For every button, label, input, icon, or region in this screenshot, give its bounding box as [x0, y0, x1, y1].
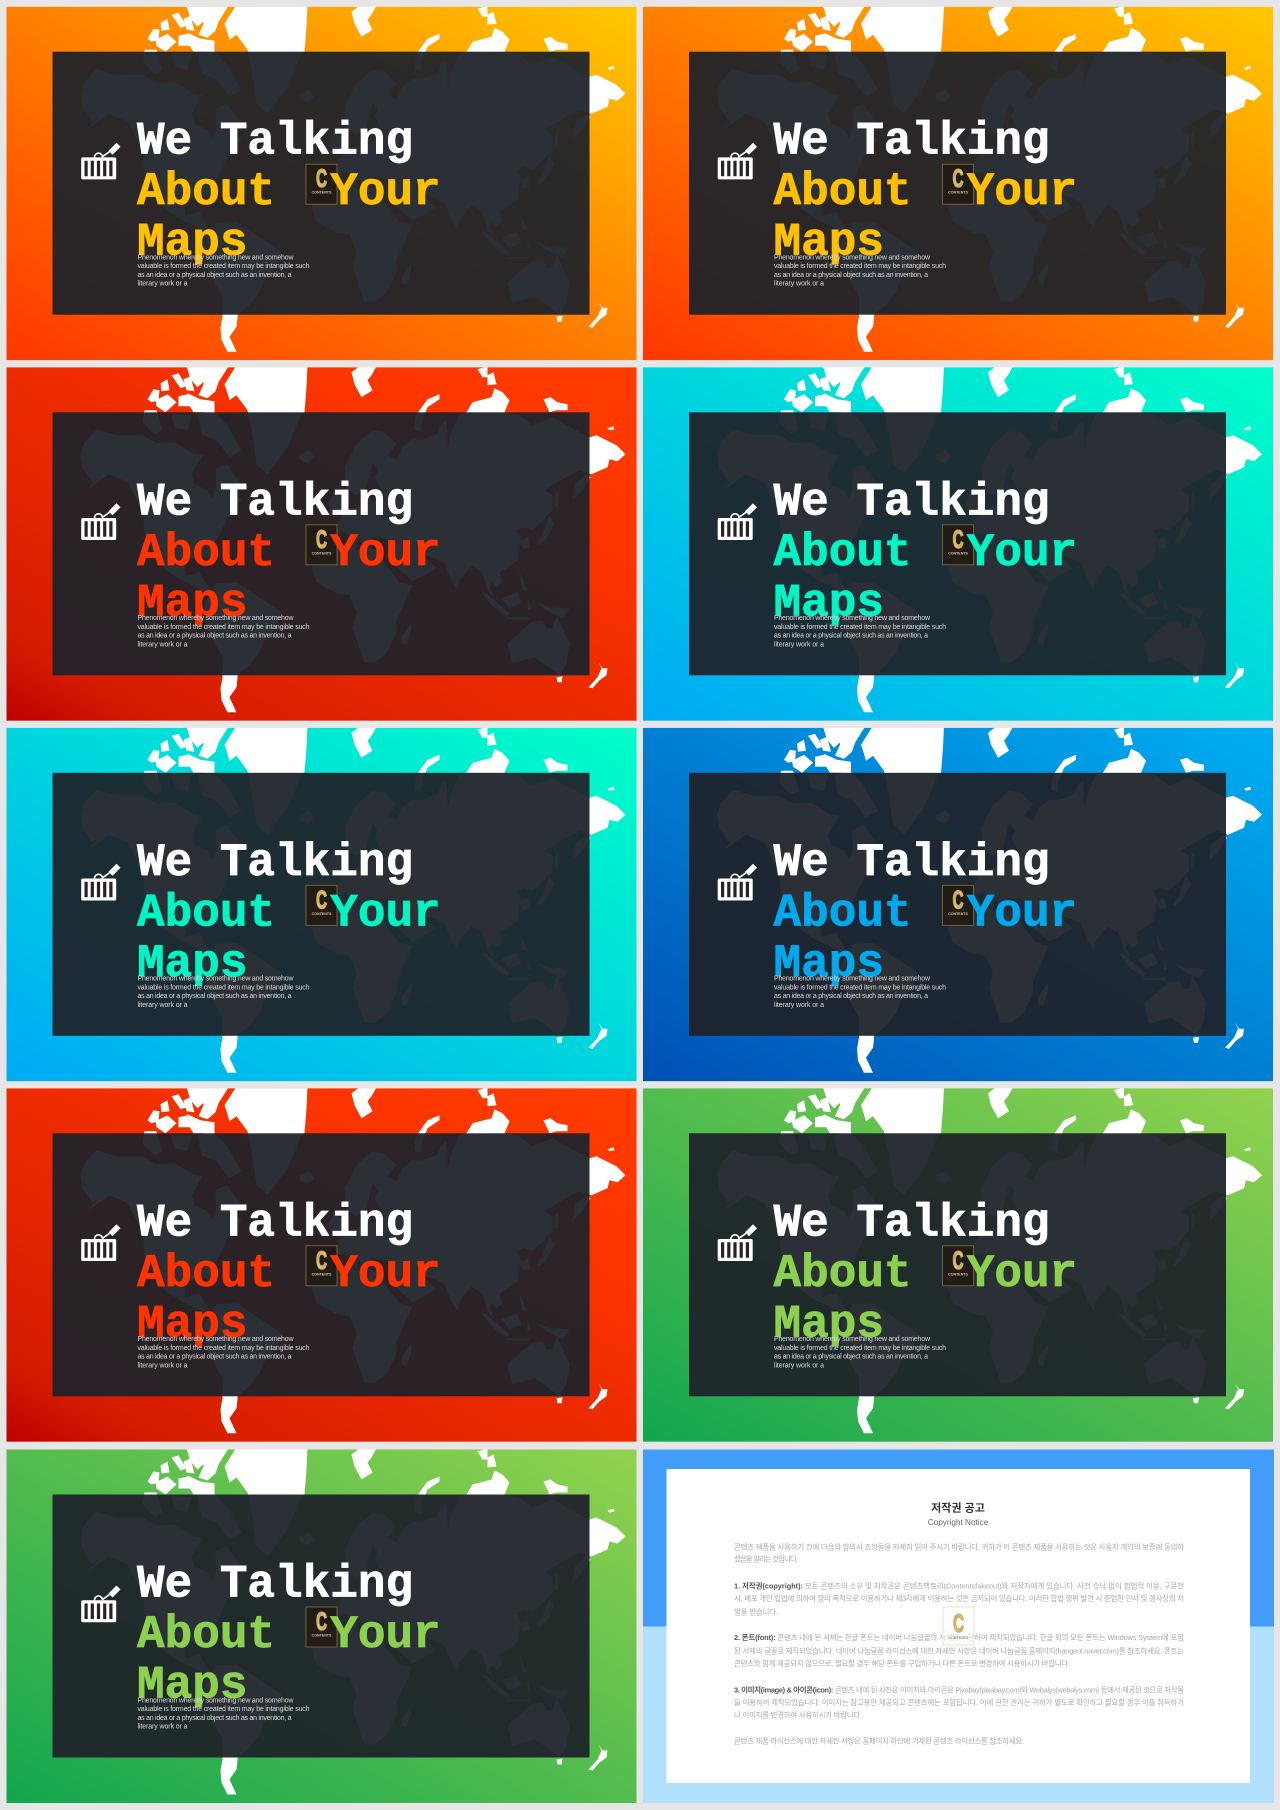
- section 1 line 3: 벌을 받습니다.: [734, 1607, 778, 1616]
- logo: CONTENTS: [312, 912, 332, 916]
- dark panel: [52, 52, 590, 315]
- white notice card: [666, 1469, 1250, 1783]
- world map: [717, 1086, 1262, 1433]
- icon: container: [718, 864, 757, 900]
- body text: Phenomenon whereby something new and somehow: [138, 1336, 294, 1343]
- section 3 line 2: 을 이용하여 제작되었습니다. 이미지는 참고용만 제공되고 콘텐츠에는 포함됩니다. 이에 관한 권리는 귀하가 별도로 확인하고 필요할 경우 이를 취득하거: [734, 1698, 1184, 1707]
- panel: slide 8 green: [643, 1088, 1273, 1442]
- body text: Phenomenon whereby something new and somehow: [138, 976, 294, 983]
- logo: [942, 164, 974, 204]
- title: About Your: [137, 527, 441, 579]
- world map: [80, 1448, 626, 1794]
- section 2 font: 2. 폰트(font): 콘텐츠 내에 된 서체는 한글 폰트는 네이버 나눔글꼴의 서체를 사용하여 제작되었습니다. 한글 외의 모든 폰트는 Windows System에 포함: [734, 1633, 1184, 1642]
- logo: [942, 885, 974, 925]
- title: Maps: [137, 577, 247, 629]
- title: Maps: [774, 217, 884, 269]
- closing line: 콘텐츠 제품 라이선스에 대한 자세한 사항은 홈페이지 하단에 기재된 콘텐츠 라이선스를 참조하세요.: [734, 1736, 1024, 1745]
- logo: CONTENTS: [312, 191, 332, 195]
- logo: [942, 525, 974, 565]
- title: About Your: [137, 887, 441, 939]
- body text: Phenomenon whereby something new and somehow: [138, 1697, 294, 1704]
- background bottom band: [643, 1626, 1274, 1803]
- title: Maps: [137, 1660, 247, 1712]
- logo: [942, 1246, 974, 1286]
- logo: C: [316, 165, 327, 193]
- title: Maps: [774, 938, 884, 990]
- logo: CONTENTS: [312, 1634, 332, 1638]
- panel: slide 6 blue: [643, 728, 1273, 1082]
- title: Maps: [137, 938, 247, 990]
- title: We Talking: [774, 116, 1050, 168]
- logo: CONTENTS: [948, 912, 968, 916]
- panel: slide 10 copyright notice: [643, 1450, 1274, 1803]
- world map: [80, 365, 626, 712]
- panel: slide 4 cyan: [643, 367, 1273, 721]
- dark panel: [52, 412, 590, 675]
- body text: literary work or a: [774, 641, 824, 648]
- logo: [306, 525, 337, 565]
- title: About Your: [774, 887, 1077, 939]
- background gradient: [6, 367, 636, 721]
- world map: [717, 5, 1262, 352]
- body text: literary work or a: [138, 641, 188, 648]
- dark panel: [52, 773, 590, 1036]
- body text: valuable is formed the created item may be intangible such: [774, 263, 946, 270]
- background gradient: [6, 728, 636, 1081]
- title: About Your: [774, 527, 1077, 579]
- icon: container: [718, 503, 757, 540]
- title: About Your: [774, 166, 1077, 218]
- body text: literary work or a: [138, 281, 188, 288]
- body text: Phenomenon whereby something new and somehow: [774, 255, 931, 262]
- body text: literary work or a: [774, 1002, 824, 1009]
- background top band: [643, 1450, 1274, 1626]
- title: We Talking: [137, 837, 413, 889]
- title: We Talking: [137, 116, 413, 168]
- body text: Phenomenon whereby something new and somehow: [774, 1336, 931, 1343]
- dark panel: [52, 1133, 590, 1396]
- logo: CONTENTS: [948, 551, 968, 555]
- logo: C: [316, 1247, 327, 1275]
- logo: C: [316, 1608, 327, 1636]
- world map: [717, 726, 1262, 1073]
- logo: CONTENTS: [948, 1272, 968, 1276]
- body text: Phenomenon whereby something new and somehow: [774, 976, 931, 983]
- panel: slide 3 red: [6, 367, 636, 721]
- dark panel: [689, 773, 1226, 1036]
- icon: container: [81, 143, 120, 179]
- logo watermark: CONTENTS: [949, 1636, 969, 1640]
- background gradient: [643, 728, 1273, 1081]
- logo: C: [316, 886, 327, 914]
- body text: as an idea or a physical object such as an invention, a: [138, 993, 292, 1000]
- logo: C: [953, 165, 963, 193]
- section 3 line 3: 나 이미지를 변경하여 사용하시기 바랍니다.: [734, 1711, 862, 1720]
- logo: [306, 164, 337, 204]
- body text: as an idea or a physical object such as an invention, a: [774, 633, 928, 640]
- background gradient: [643, 7, 1273, 360]
- body text: Phenomenon whereby something new and somehow: [138, 615, 294, 622]
- section 1 line 2: 시, 배포 개인 입법에 의하여 영리 목적으로 이용하거나 제3자에게 이용하는 것은 금지되어 있습니다. 이러한 합법 행위 발견 시 준엄한 민사 및 형사상의 처: [734, 1594, 1184, 1603]
- body text: literary work or a: [138, 1724, 188, 1730]
- logo: C: [953, 526, 963, 554]
- notice subheading: Copyright Notice: [928, 1518, 989, 1527]
- logo watermark: C: [953, 1610, 964, 1638]
- panel: slide 9 green: [6, 1450, 636, 1803]
- body text: valuable is formed the created item may be intangible such: [138, 624, 310, 631]
- dark panel: [52, 1494, 590, 1758]
- body text: valuable is formed the created item may be intangible such: [774, 624, 946, 631]
- title: We Talking: [774, 476, 1050, 528]
- body text: as an idea or a physical object such as an invention, a: [774, 1354, 928, 1361]
- body text: valuable is formed the created item may be intangible such: [138, 1345, 310, 1352]
- body text: valuable is formed the created item may be intangible such: [138, 263, 310, 270]
- logo: CONTENTS: [948, 191, 968, 195]
- icon: container: [81, 864, 120, 900]
- notice heading: 저작권 공고: [931, 1501, 985, 1515]
- background gradient: [6, 7, 636, 360]
- title: About Your: [774, 1248, 1077, 1300]
- icon: container: [81, 1224, 120, 1261]
- title: We Talking: [137, 1558, 413, 1610]
- world map: [80, 726, 626, 1073]
- intro paragraph: 셨음을 알리는 것입니다.: [734, 1555, 798, 1564]
- logo: [306, 1607, 337, 1647]
- icon: container: [718, 1224, 757, 1261]
- body text: valuable is formed the created item may be intangible such: [138, 1706, 310, 1713]
- icon: container: [81, 503, 120, 540]
- background gradient: [643, 367, 1273, 721]
- logo watermark: [943, 1607, 974, 1645]
- body text: as an idea or a physical object such as an invention, a: [138, 1715, 292, 1722]
- title: We Talking: [774, 837, 1050, 889]
- background gradient: [6, 1450, 636, 1803]
- body text: as an idea or a physical object such as an invention, a: [774, 272, 928, 279]
- body text: literary work or a: [138, 1362, 188, 1369]
- body text: Phenomenon whereby something new and somehow: [774, 615, 931, 622]
- body text: literary work or a: [774, 281, 824, 288]
- title: We Talking: [774, 1197, 1050, 1249]
- title: We Talking: [137, 476, 413, 528]
- logo: [306, 885, 337, 925]
- title: Maps: [774, 577, 884, 629]
- panel: slide 5 cyan: [6, 728, 636, 1082]
- body text: as an idea or a physical object such as an invention, a: [138, 1354, 292, 1361]
- title: About Your: [137, 166, 441, 218]
- panel: slide 7 red: [6, 1088, 636, 1442]
- title: We Talking: [137, 1197, 413, 1249]
- world map: [717, 365, 1262, 712]
- body text: valuable is formed the created item may be intangible such: [138, 984, 310, 991]
- title: About Your: [137, 1248, 441, 1300]
- title: Maps: [137, 217, 247, 269]
- title: Maps: [774, 1298, 884, 1350]
- dark panel: [689, 52, 1226, 315]
- dark panel: [689, 412, 1226, 675]
- background gradient: [6, 1088, 636, 1442]
- section 2 line 3: 콘텐츠와 함께 제공되지 않으므로, 필요할 경우 해당 폰트를 구입하거나 다른 폰트로 변경하여 사용하시기 바랍니다.: [734, 1659, 1070, 1668]
- dark panel: [689, 1133, 1226, 1396]
- title: About Your: [137, 1609, 441, 1661]
- body text: literary work or a: [774, 1362, 824, 1369]
- section 2 line 2: 된 서체의 글꼴로 제작되었습니다. 네이버 나눔글꼴 라이선스에 대한 자세한 사항은 네이버 나눔글꼴 홈페이지(hangeul.naver.com)를 참조하세요. 폰트는: [734, 1646, 1184, 1655]
- icon: container: [81, 1586, 120, 1622]
- body text: as an idea or a physical object such as an invention, a: [774, 993, 928, 1000]
- body text: valuable is formed the created item may be intangible such: [774, 1345, 946, 1352]
- icon: container: [718, 143, 757, 179]
- background gradient: [643, 1088, 1273, 1442]
- section 1 copyright: 1. 저작권(copyright): 모든 콘텐츠의 소유 및 저작권은 콘텐츠팩토리(Contentsfakeout)와 저작자에게 있습니다. 사전 승낙 없이 합법적 이용, 구문전: [734, 1581, 1184, 1590]
- body text: Phenomenon whereby something new and somehow: [138, 255, 294, 262]
- intro paragraph: 콘텐츠 제품을 사용하기 전에 다음의 합의서 조항들을 자세히 읽어 주시기 바랍니다. 귀하가 이 콘텐츠 제품을 사용하는 것은 사용자 계약의 보증에 동의하: [734, 1542, 1184, 1552]
- body text: as an idea or a physical object such as an invention, a: [138, 633, 292, 640]
- world map: [80, 5, 626, 352]
- body text: literary work or a: [138, 1002, 188, 1009]
- panel: slide 1 orange: [6, 6, 636, 360]
- logo: C: [316, 526, 327, 554]
- world map: [80, 1086, 626, 1433]
- logo: C: [953, 1247, 963, 1275]
- section 3 image and icon: 3. 이미지(image) & 아이콘(icon): 콘텐츠 내에 된 사진은 이미지와 아이콘은 Pixabay(pixabay.com)와 Webalys(webalys.com) 등에서 제공된 것으로 저작물: [734, 1685, 1184, 1694]
- body text: as an idea or a physical object such as an invention, a: [138, 272, 292, 279]
- title: Maps: [137, 1298, 247, 1350]
- panel: slide 2 orange: [643, 6, 1273, 360]
- logo: C: [953, 886, 963, 914]
- logo: CONTENTS: [312, 1272, 332, 1276]
- logo: [306, 1246, 337, 1286]
- body text: valuable is formed the created item may be intangible such: [774, 984, 946, 991]
- logo: CONTENTS: [312, 551, 332, 555]
